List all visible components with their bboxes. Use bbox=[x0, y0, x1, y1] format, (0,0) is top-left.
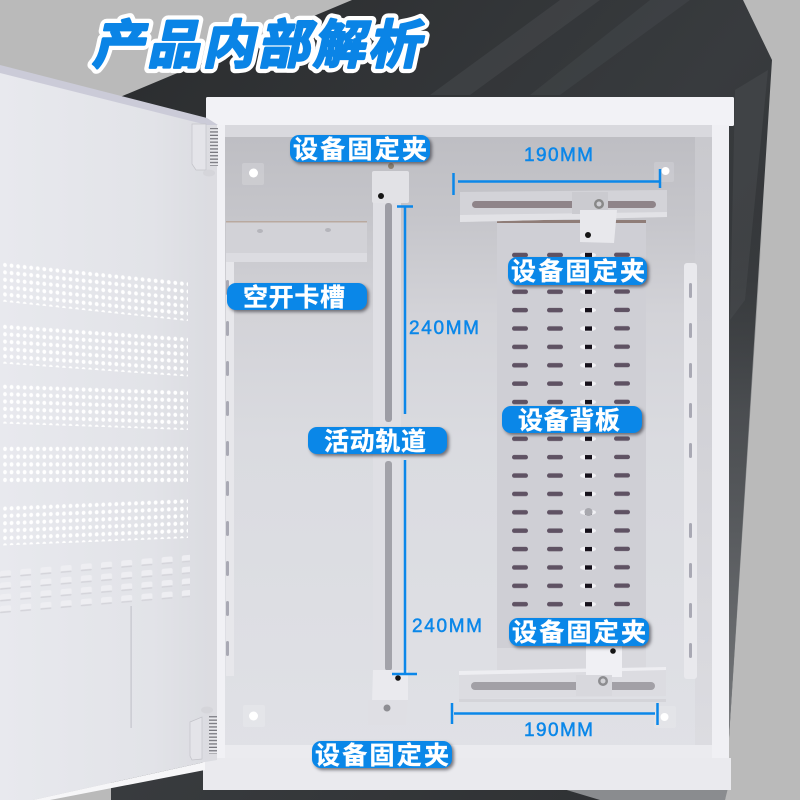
door panel seam bbox=[130, 606, 132, 728]
bottom inner lip bbox=[224, 745, 712, 760]
right wall bbox=[712, 125, 729, 765]
door bottom lip bbox=[33, 762, 205, 800]
bottom horizontal bracket bbox=[459, 646, 666, 702]
label: movable rail: 活动轨道 bbox=[324, 428, 426, 456]
bottom lid bbox=[203, 758, 731, 790]
label: right upper clamp: 设备固定夹 bbox=[511, 258, 645, 286]
dimension: upper 240MM: 240MM bbox=[409, 318, 479, 339]
embossed slots bbox=[0, 553, 190, 616]
title: 产品内部解析 bbox=[89, 17, 430, 75]
bottom rail clamp bbox=[368, 670, 408, 725]
dimension: bottom 190MM: 190MM bbox=[524, 720, 593, 741]
breaker rail bracket bbox=[226, 221, 367, 262]
interior back panel bbox=[218, 125, 712, 760]
ventilation dots bbox=[2, 261, 188, 545]
label: right lower clamp: 设备固定夹 bbox=[512, 619, 646, 647]
door panel bbox=[0, 72, 217, 800]
dimension: top 190MM: 190MM bbox=[524, 145, 593, 166]
dimension: lower 240MM bbox=[392, 460, 482, 674]
backplate slots bbox=[497, 248, 647, 616]
door bbox=[0, 65, 218, 800]
dimension: upper 240MM bbox=[397, 206, 479, 414]
dimension: lower 240MM: 240MM bbox=[412, 616, 482, 637]
hinge: top bbox=[192, 124, 218, 176]
top rail clamp bbox=[372, 163, 409, 203]
left wall bbox=[217, 125, 225, 760]
title: 产品内部解析 bbox=[89, 17, 430, 75]
backplate bbox=[497, 220, 647, 670]
label: backplate: 设备背板 bbox=[518, 407, 620, 435]
dimension: bottom 190MM bbox=[452, 703, 658, 741]
movable rail bbox=[373, 195, 401, 685]
mounting holes bbox=[242, 162, 676, 728]
right inner shade bbox=[695, 137, 712, 749]
left slotted strip bbox=[226, 262, 234, 676]
dimension: top 190MM bbox=[454, 145, 660, 195]
label: top clamp: 设备固定夹 bbox=[293, 136, 427, 164]
label: breaker slot: 空开卡槽 bbox=[243, 284, 345, 312]
top horizontal bracket bbox=[460, 190, 667, 243]
top inner lip bbox=[218, 125, 712, 137]
label: bottom clamp: 设备固定夹 bbox=[315, 742, 449, 770]
door edge bbox=[207, 125, 217, 760]
right slotted strip bbox=[684, 263, 697, 679]
hinge: bottom bbox=[190, 706, 217, 760]
backplate screw bbox=[584, 508, 592, 516]
cabinet body bbox=[203, 97, 734, 790]
top lid bbox=[206, 97, 734, 126]
door top lip bbox=[0, 65, 218, 125]
